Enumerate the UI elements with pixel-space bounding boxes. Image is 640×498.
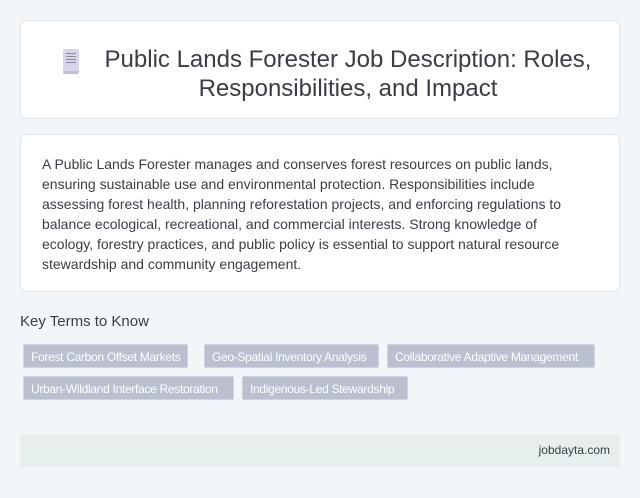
tag: Forest Carbon Offset Markets: [31, 350, 180, 364]
icon: document: [63, 49, 79, 74]
tag: Collaborative Adaptive Management: [395, 350, 578, 364]
footer: [20, 434, 620, 467]
tag: Indigenous-Led Stewardship: [250, 382, 394, 396]
tag: [242, 376, 408, 400]
description text: assessing forest health, planning reforestation projects, and enforcing regulations to: [42, 196, 561, 212]
footer text: jobdayta.com: [539, 443, 610, 457]
tag: [23, 376, 234, 400]
description card: [20, 134, 620, 292]
description text: stewardship and community engagement.: [42, 256, 301, 272]
description text: ecology, forestry practices, and public policy is essential to support natural resource: [42, 236, 559, 252]
tag: [23, 344, 188, 368]
description text: ensuring sustainable use and environmental protection. Responsibilities include: [42, 176, 535, 192]
description text: balance ecological, recreational, and commercial interests. Strong knowledge of: [42, 216, 537, 232]
tag: [204, 344, 379, 368]
description text: A Public Lands Forester manages and conserves forest resources on public lands,: [42, 156, 553, 172]
title: Public Lands Forester Job Description: Roles, Responsibilities, and Impact: [105, 46, 591, 102]
tag: Urban-Wildland Interface Restoration: [31, 382, 218, 396]
description text: [42, 156, 561, 272]
heading: key terms: Key Terms to Know: [20, 313, 149, 330]
header card: [20, 20, 620, 119]
tag: Geo-Spatial Inventory Analysis: [212, 350, 366, 364]
tag: [387, 344, 595, 368]
